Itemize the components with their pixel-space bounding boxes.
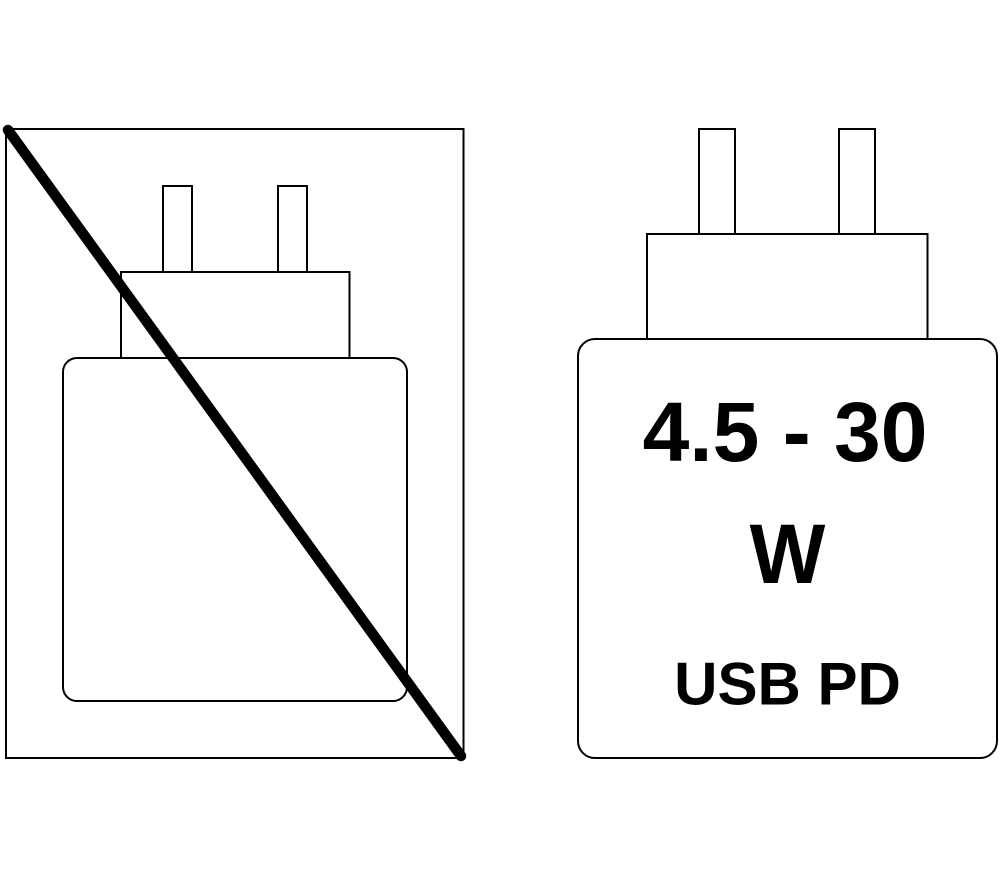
icon: large charger neck bbox=[647, 234, 928, 339]
frame bbox=[6, 129, 464, 758]
icon: large charger body bbox=[578, 339, 997, 758]
icon: small charger neck bbox=[121, 272, 350, 358]
icon: prohibition slash bbox=[8, 130, 461, 756]
text: USB PD label: USB PD bbox=[674, 650, 901, 718]
text: wattage range: 4.5 - 30 bbox=[643, 385, 927, 479]
panel: USB PD charger specification bbox=[578, 129, 997, 758]
icon: small charger prongs bbox=[163, 186, 307, 272]
panel: charger not included bbox=[6, 129, 464, 758]
text: watt unit: W bbox=[750, 508, 826, 601]
icon: small charger body bbox=[63, 358, 407, 701]
icon: large charger prongs bbox=[699, 129, 875, 234]
